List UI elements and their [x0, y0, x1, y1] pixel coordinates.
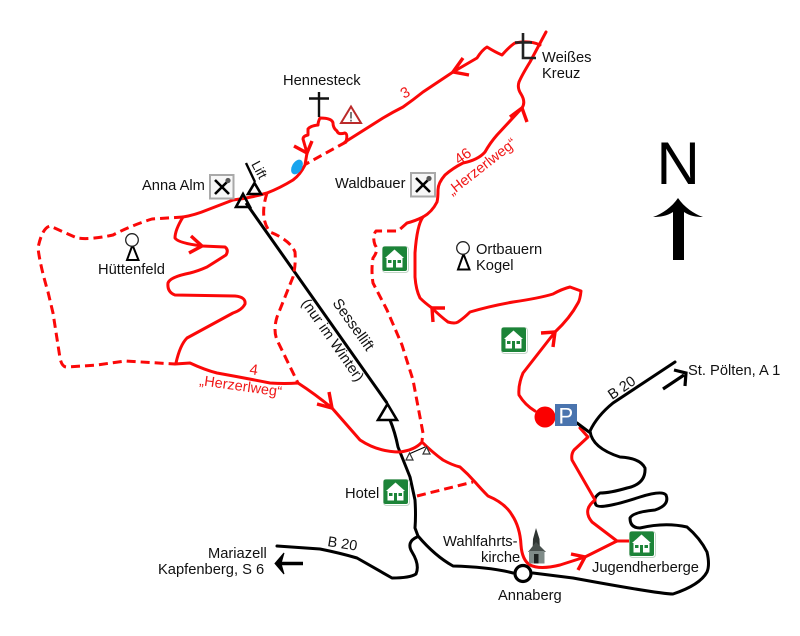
- lift: lower station triangle: [378, 404, 397, 420]
- label: Wahlfahrts-: Wahlfahrts-: [443, 534, 518, 550]
- label: Herzerlweg south: „Herzerlweg“: [198, 373, 283, 401]
- black roads: [277, 362, 708, 594]
- label: Kreuz: Kreuz: [542, 66, 580, 82]
- icon: Hotel: [384, 480, 410, 506]
- trail: dashed west loop: [38, 217, 183, 367]
- parking letter: P: [558, 404, 573, 428]
- arrow head: [275, 553, 284, 574]
- lift triangle top: [236, 194, 250, 207]
- label: Anna Alm: Anna Alm: [142, 178, 205, 194]
- label: nur im Winter: (nur im Winter): [298, 296, 367, 385]
- icon: Weißes Kreuz cross: [515, 33, 536, 58]
- trail: route 46 Herzerlweg: [407, 32, 546, 223]
- small lift triangle 1: [406, 453, 413, 460]
- arrow: to hostel: [571, 554, 585, 570]
- north arrow: [653, 198, 703, 260]
- icon: parking start point: [534, 406, 556, 428]
- label: Sessellift: Sessellift: [329, 295, 378, 355]
- icon: Annaberg town ring: [515, 566, 531, 582]
- icon: hut near dashed trail: [382, 246, 408, 272]
- trail: dashed lift connection: [264, 193, 298, 383]
- label: Lift: Lift: [248, 158, 270, 182]
- trail: dashed Hotel link: [417, 482, 473, 496]
- label: trail 4: 4: [248, 361, 259, 379]
- small lift triangle 2: [423, 447, 430, 454]
- label: Mariazell: Mariazell: [208, 546, 267, 562]
- label: Annaberg: Annaberg: [498, 588, 562, 604]
- north marker: [653, 130, 703, 260]
- arrow shaft: [280, 562, 303, 565]
- arrow: from parking: [541, 332, 555, 347]
- label: Hotel: Hotel: [345, 486, 379, 502]
- trail: to youth hostel and parking: [572, 428, 617, 541]
- arrow: Hüttenfeld: [189, 236, 202, 253]
- icon: restaurant Waldbauer: [411, 173, 435, 196]
- labels: places: [98, 50, 780, 604]
- icon: Ortbauern Kogel summit: [457, 242, 470, 270]
- chair lift line: [246, 203, 387, 403]
- summit circle: [457, 242, 469, 254]
- red trail: dashed connections: [38, 142, 473, 496]
- roof: [528, 542, 546, 552]
- door: [534, 554, 538, 564]
- summit triangle: [458, 254, 470, 270]
- summit triangle: [127, 245, 138, 260]
- nave: [529, 551, 544, 564]
- summit circle: [126, 234, 138, 246]
- icon: lake: [289, 158, 305, 176]
- icon: warning triangle: [341, 106, 361, 123]
- label: Herzerlweg north: „Herzerlweg“: [445, 135, 520, 199]
- arrow: to St. Pölten: [663, 370, 686, 389]
- arrow: route 4: [317, 392, 332, 408]
- trail: Hennesteck wiggle: [183, 118, 347, 217]
- label: B 20 east: B 20: [605, 373, 639, 403]
- spire: [532, 528, 540, 552]
- label: Kapfenberg: Kapfenberg, S 6: [158, 562, 264, 578]
- warning mark: [350, 112, 352, 122]
- icon: Jugendherberge: [630, 532, 656, 558]
- label: Weißes: Weißes: [542, 50, 592, 66]
- label: Hennesteck: Hennesteck: [283, 73, 361, 89]
- arrow: Hennesteck descent: [294, 141, 312, 153]
- label: Waldbauer: Waldbauer: [335, 176, 406, 192]
- parking square: [555, 404, 577, 426]
- icon: Hennesteck cross: [309, 92, 329, 117]
- trail: Hüttenfeld serpentine: [168, 217, 245, 363]
- road: B 20 west: [277, 537, 417, 578]
- red trail: solid routes: [168, 32, 629, 568]
- direction arrows on trail: [189, 58, 585, 570]
- small lift line: [246, 163, 255, 182]
- arrow: route 3: [453, 58, 469, 75]
- labels: red trail: [198, 84, 520, 401]
- label: Kogel: Kogel: [476, 258, 514, 274]
- icon: pilgrimage church: [528, 528, 546, 564]
- arrow: route 46: [510, 108, 527, 122]
- arrow: to Mariazell: [275, 553, 303, 574]
- icon: hut near parking: [502, 328, 528, 354]
- labels: rotated lift and road: [248, 158, 639, 555]
- trail: route 3: [345, 42, 540, 142]
- small lift triangle: [248, 183, 261, 194]
- label: St. Pölten: St. Pölten, A 1: [688, 363, 780, 379]
- road: B 20 east and loops: [533, 362, 708, 594]
- label: B 20 west: B 20: [326, 534, 358, 555]
- road: through Annaberg to lift: [390, 420, 513, 573]
- label: trail 3: 3: [398, 84, 413, 102]
- icon: parking sign: [555, 404, 577, 428]
- trail: route 4 Herzerlweg: [175, 363, 629, 568]
- trail: return from parking: [415, 217, 581, 411]
- label: kirche: kirche: [481, 550, 520, 566]
- small lift near Hotel: [406, 447, 430, 460]
- label: trail 46: 46: [451, 145, 475, 168]
- arrow: return trail west: [432, 308, 445, 322]
- trail: dashed Waldbauer connection: [372, 223, 423, 441]
- small lift line: [409, 447, 425, 454]
- road: spur to parking: [577, 423, 589, 432]
- label: Hüttenfeld: Hüttenfeld: [98, 262, 165, 278]
- lift: upper station and small lift: [236, 163, 261, 207]
- label: Jugendherberge: Jugendherberge: [592, 560, 699, 576]
- trail: dashed Hennesteck link: [306, 142, 346, 164]
- label: Ortbauern: Ortbauern: [476, 242, 542, 258]
- north letter: N: [656, 130, 700, 197]
- icon: restaurant Anna Alm: [210, 175, 234, 198]
- icon: Hüttenfeld summit: [126, 234, 138, 260]
- warning triangle shape: [341, 106, 361, 123]
